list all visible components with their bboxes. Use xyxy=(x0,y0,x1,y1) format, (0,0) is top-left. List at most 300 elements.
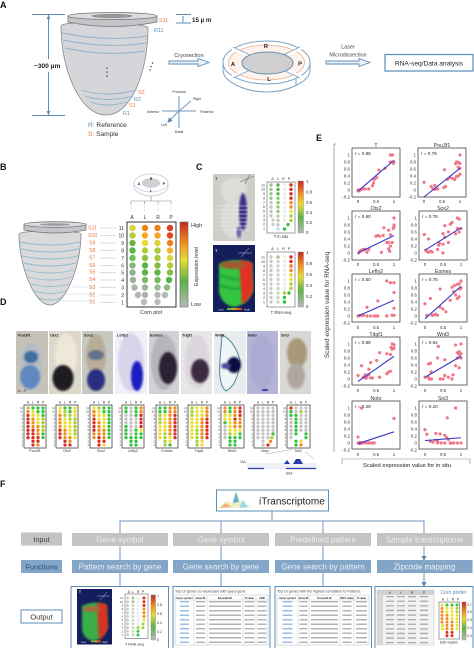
colorbar: RNA-seq: 0.6 xyxy=(306,272,313,277)
corn plot: T in situ: 10 xyxy=(261,188,265,192)
image: T RNA-seq 3D: High xyxy=(244,308,251,312)
scatter: Eomes: 0.4 xyxy=(411,300,418,304)
scatter: Otx2: -0.2 xyxy=(342,258,351,262)
ring section diagram xyxy=(223,41,310,92)
corn plot: Lefty2: 11 xyxy=(118,406,121,410)
arrows functions to output xyxy=(120,573,424,586)
gene names: Lefty2 xyxy=(128,449,138,453)
output 1: pattern search: 8 xyxy=(121,607,123,611)
scatter: Tdgf1: 0.6 xyxy=(344,356,351,360)
corn plot: Six3: 7 xyxy=(284,421,286,425)
compass: Anterior xyxy=(147,110,160,114)
scatter: Sox2: r = 0.76 xyxy=(422,214,438,219)
scatter: Lefty2: 0 xyxy=(357,325,360,330)
scatter: T: 0 xyxy=(357,199,360,204)
scatter: Eomes: -0.2 xyxy=(409,320,418,326)
input boxes xyxy=(72,533,472,546)
output 1: pattern search: 5 xyxy=(121,618,123,622)
section and row labels xyxy=(88,226,124,306)
scatter: Sox2: 0 xyxy=(415,250,418,256)
corn plot: Pou3f1: 6 xyxy=(21,424,23,428)
corn plot: Wnt3: 4 xyxy=(218,432,220,436)
corn plot: T in situ: 9 xyxy=(263,192,265,196)
section and row labels: S9 xyxy=(89,240,95,246)
scatter: T: 0 xyxy=(348,188,351,192)
section and row labels: 4 xyxy=(121,278,124,284)
corn plot: Corn plot xyxy=(140,310,162,316)
embryo cup diagram xyxy=(61,12,157,115)
scatter: Six3: r = 0.10 xyxy=(422,404,438,409)
corn plot: Wnt3: 11 xyxy=(217,406,220,410)
output 4: zipcode mapping: 0.4 xyxy=(467,626,472,630)
gene names: Eomes xyxy=(161,449,173,453)
logo box xyxy=(216,490,328,511)
image: Pou3f1: Pou3f1 xyxy=(18,334,31,338)
scatter: Noto: 1 xyxy=(348,406,351,410)
corn plot: Wnt3: 9 xyxy=(218,413,220,417)
corn plot: Lefty2: 10 xyxy=(118,410,121,414)
corn plot: T in situ: ALRP xyxy=(271,177,291,181)
label C: C xyxy=(196,162,203,172)
section and row labels: 3 xyxy=(121,286,124,292)
input boxes: Sample transcriptome xyxy=(386,536,464,544)
corn plot: T RNA-seq: 11 xyxy=(261,256,265,260)
corn plot: Wnt3: ALRP xyxy=(224,400,242,404)
scatter: Otx2: 0.4 xyxy=(344,236,351,242)
corn plot: Otx2: 4 xyxy=(53,432,55,436)
output 3: pattern table: P value xyxy=(357,596,367,600)
label E: E xyxy=(316,133,322,143)
scatter: T: 0.4 xyxy=(344,174,351,178)
ring section diagram: L xyxy=(267,77,271,83)
output 1: pattern search: 4 xyxy=(121,622,123,626)
arrow: laser microdissection xyxy=(326,44,370,66)
scatter: Eomes: 0.5 xyxy=(440,325,447,330)
scatter: Tdgf1 xyxy=(342,332,400,393)
corn plot: Wnt3: 5 xyxy=(218,428,220,432)
scatter: Wnt3: 0 xyxy=(415,376,418,382)
corn plot: Sox2: 7 xyxy=(87,421,89,425)
scatter: Six3: 0.2 xyxy=(411,434,418,438)
scatter: Pou3f1: 0 xyxy=(423,199,426,204)
label F: F xyxy=(0,479,6,489)
output 1: pattern search: 11 xyxy=(120,596,123,600)
connectors xyxy=(120,511,424,533)
corn plot: Six3: 2 xyxy=(284,439,286,443)
section and row labels: S10 xyxy=(88,233,97,239)
scatter: Pou3f1 xyxy=(408,143,466,204)
scatter: Eomes: 1 xyxy=(460,325,463,330)
corn plot: Sox2: 3 xyxy=(87,436,89,440)
scatter: Tdgf1: Tdgf1 xyxy=(369,332,383,338)
corn plot: Tdgf1: 11 xyxy=(184,406,187,410)
section labels xyxy=(123,18,168,117)
output 3: pattern table: Gene symbol xyxy=(279,596,296,600)
output 3: pattern table: Ensembl ID xyxy=(317,596,332,600)
corn plot: Otx2: 6 xyxy=(53,424,55,428)
corn plot: Otx2: 11 xyxy=(52,406,55,410)
corn plot: Eomes: 10 xyxy=(152,410,155,414)
scatter: Noto: 0 xyxy=(357,452,360,457)
corn plot: Noto: 9 xyxy=(251,413,253,417)
legend reference and sample: Sample xyxy=(96,131,118,138)
corn plot: Pou3f1 xyxy=(20,400,46,448)
section and row labels: 2 xyxy=(121,293,124,299)
panel D: whole mount in situ images and corn plots xyxy=(0,297,317,476)
scatter: Tdgf1: 0.2 xyxy=(344,370,351,374)
output 4: zipcode mapping: 0.3 xyxy=(467,634,472,638)
corn plot: Eomes: 8 xyxy=(153,417,155,421)
scatter: Pou3f1: 1 xyxy=(414,152,417,158)
scatter: Wnt3: 0.8 xyxy=(411,348,418,354)
output 1: pattern search: 0.8 xyxy=(157,603,162,607)
output 1: pattern search xyxy=(71,586,168,648)
output 4: zipcode mapping: E5D~EpiSC xyxy=(440,640,459,644)
colorbar: in situ xyxy=(298,179,313,235)
corn plot: Sox2: 11 xyxy=(86,406,89,410)
corn plot: Six3: 5 xyxy=(284,428,286,432)
corn plot: Sox2: 1 xyxy=(87,443,89,447)
scatter: Tdgf1: 0 xyxy=(348,376,351,382)
corn plot: Otx2: 5 xyxy=(53,428,55,432)
output 1: pattern search: 0 xyxy=(157,638,159,642)
output 1: pattern search: 2 xyxy=(121,629,123,633)
corn plot: Wnt3: 2 xyxy=(218,439,220,443)
scatter: T: T xyxy=(374,143,378,149)
ellipsis dots xyxy=(107,63,152,76)
corn plot: T in situ: 1 xyxy=(263,227,265,231)
panel E: scatter plots xyxy=(316,133,470,469)
output 2: co-expressed table: Gene ID xyxy=(196,596,206,600)
scatter: Otx2: 1 xyxy=(393,262,396,267)
scatter: T: 0.8 xyxy=(344,160,351,164)
output 3: pattern table: ROC value xyxy=(340,596,354,600)
image: Eomes: Eomes xyxy=(150,334,162,338)
scatter: Wnt3: -0.2 xyxy=(409,384,418,388)
output 4: zipcode mapping xyxy=(375,586,473,648)
output 2: co-expressed table xyxy=(173,586,270,648)
corn plot: Eomes: 5 xyxy=(153,428,155,432)
corn plot: T RNA-seq: 3 xyxy=(263,292,265,296)
corn plot: Eomes: 6 xyxy=(153,424,155,428)
corn plot: Six3: 6 xyxy=(284,424,286,428)
colorbar: in situ: 0.8 xyxy=(306,190,313,194)
scatter: Wnt3: Wnt3 xyxy=(437,332,449,338)
image: Lefty2 xyxy=(115,331,147,394)
gene names: Noto xyxy=(261,449,269,453)
compass: Proximal xyxy=(172,90,186,94)
corn plot: T in situ: 5 xyxy=(263,210,265,214)
section and row labels: S1 xyxy=(89,300,95,306)
scatter: Six3: 0.5 xyxy=(440,452,447,457)
output 2: co-expressed table: Ensembl ID xyxy=(218,596,232,600)
scatter: Otx2: 0.2 xyxy=(344,244,351,248)
scatter: Otx2: 0.8 xyxy=(344,222,351,228)
colorbar: RNA-seq: 0 xyxy=(306,304,309,309)
corn plot: Wnt3: 1 xyxy=(218,443,220,447)
scatter: Sox2: Sox2 xyxy=(437,206,449,212)
gene names: Tdgf1 xyxy=(194,449,204,453)
section and row labels: 6 xyxy=(121,264,124,270)
scatter: Noto: 0.4 xyxy=(344,426,351,432)
scatter: Eomes: 0.6 xyxy=(411,292,418,298)
corn plot: Noto: 8 xyxy=(251,417,253,421)
scatter: Sox2: 0.6 xyxy=(411,230,418,234)
colorbar: in situ: 1 xyxy=(306,179,309,184)
scatter: Noto: -0.2 xyxy=(342,448,351,452)
scatter: Noto: 1 xyxy=(393,452,396,457)
corn plot: Pou3f1: 3 xyxy=(21,436,23,440)
corn plot: Lefty2: 4 xyxy=(119,432,121,436)
output 3: pattern table: Gene ID xyxy=(299,596,309,600)
image: Otx2 xyxy=(49,331,81,394)
scatter: Eomes: 0.2 xyxy=(411,306,418,312)
corn plot: Six3 xyxy=(283,400,310,448)
section and row labels: 5 xyxy=(121,270,124,276)
row label: Input xyxy=(21,532,62,546)
corn plot: T RNA-seq: T RNA-seq xyxy=(271,310,292,315)
output 1: pattern search: T xyxy=(79,590,81,594)
section and row labels: 10 xyxy=(118,234,124,240)
scatter: Eomes: Eomes xyxy=(435,269,451,275)
section and row labels: S11 xyxy=(88,226,97,232)
corn plot: Otx2: 7 xyxy=(53,421,55,425)
scatter: Lefty2: 0.5 xyxy=(373,325,380,330)
compass: Posterior xyxy=(200,110,215,114)
colorbar: RNA-seq: 1 xyxy=(306,250,309,255)
output 4: zipcode mapping: ALRP xyxy=(442,598,460,602)
scatter: Otx2: 0 xyxy=(357,262,360,267)
corn plot: Wnt3: 3 xyxy=(218,436,220,440)
corn plot: Tdgf1: 4 xyxy=(185,432,187,436)
corn plot: Otx2: 3 xyxy=(53,436,55,440)
scatter: Pou3f1: r = 0.79 xyxy=(421,151,437,156)
scatter: Tdgf1: -0.2 xyxy=(342,384,351,388)
input boxes: Predefined pattern xyxy=(290,536,356,544)
gene names: Sox2 xyxy=(97,449,105,453)
corn plot: Sox2: ALRP xyxy=(93,400,111,404)
scatter: Noto: 0.6 xyxy=(344,420,351,424)
image: Eomes xyxy=(149,331,179,394)
height dimension: ~300 µm xyxy=(34,63,60,70)
corn plot: Six3: 4 xyxy=(284,432,286,436)
scatter: Pou3f1: -0.2 xyxy=(408,194,417,200)
output 2: co-expressed table: FDR xyxy=(259,596,265,600)
section labels: S1 xyxy=(129,103,136,109)
section and row labels: 11 xyxy=(119,226,124,232)
corn plot: Sox2: 5 xyxy=(87,428,89,432)
corn plot: T RNA-seq: 4 xyxy=(263,287,265,291)
scatter: Pou3f1: 0.4 xyxy=(410,174,417,178)
scatter: Wnt3: 0.2 xyxy=(411,370,418,374)
colorbar: in situ: 0.4 xyxy=(306,210,313,215)
scatter: Pou3f1: 0.8 xyxy=(410,160,417,164)
scatter: Otx2 xyxy=(342,206,400,267)
corn plot: Six3: 9 xyxy=(284,413,286,417)
image: T in situ: T xyxy=(215,176,218,181)
panel A: sampling workflow xyxy=(0,0,473,138)
corn plot: Eomes: 7 xyxy=(153,421,155,425)
scatter: Noto: 0 xyxy=(348,440,351,446)
scatter: Noto: 0.8 xyxy=(344,412,351,418)
corn plot: Pou3f1: 11 xyxy=(20,406,23,410)
compass: Distal xyxy=(175,130,183,134)
output 1: pattern search: 1 xyxy=(121,633,123,637)
scatter: Noto: Noto xyxy=(371,396,382,402)
image: Wnt3: Wnt3 xyxy=(215,334,224,338)
gene names: Pou3f1 xyxy=(29,449,41,453)
image: Six3: Six3 xyxy=(281,334,289,338)
corn plot: Pou3f1: 8 xyxy=(21,417,23,421)
corn plot: Lefty2: 3 xyxy=(119,436,121,440)
scatter: Lefty2: Lefty2 xyxy=(369,269,383,275)
corn plot: Pou3f1: 2 xyxy=(21,439,23,443)
scatter: Six3: 0.8 xyxy=(411,412,418,418)
image: Sox2: Sox2 xyxy=(84,334,93,338)
scatter: Six3: 1 xyxy=(415,406,418,410)
legend reference and sample: R: Reference xyxy=(88,122,127,129)
section and row labels: S3 xyxy=(89,285,95,291)
scatter: Six3 xyxy=(409,396,467,457)
scatter: T xyxy=(342,143,400,204)
scatter: Wnt3 xyxy=(409,332,467,393)
scatter: Six3: 0 xyxy=(415,440,418,446)
corn plot: Noto: 7 xyxy=(251,421,253,425)
row label: Output xyxy=(21,610,62,623)
output 1: pattern search: ALRP xyxy=(128,590,145,594)
scatter: Noto xyxy=(342,396,400,457)
scatter: T: -0.2 xyxy=(342,194,351,200)
panel C: T expression xyxy=(196,162,313,315)
input boxes: Gene symbol xyxy=(197,536,245,544)
image: Pou3f1 xyxy=(16,331,48,394)
genome track: Six3 xyxy=(286,472,292,476)
corn plot: Tdgf1: ALRP xyxy=(191,400,209,404)
output 2: co-expressed table: Top 10 genes co-expressed with query gene xyxy=(175,590,246,594)
scatter: Pou3f1: 1 xyxy=(459,199,462,204)
scatter: Lefty2: 1 xyxy=(348,278,351,284)
image: Noto xyxy=(247,331,278,394)
corn plot: Eomes: 11 xyxy=(152,406,155,410)
RNA-seq box xyxy=(385,54,473,71)
output 4: zipcode mapping: 0.7 xyxy=(467,603,472,607)
x axis bracket xyxy=(342,459,470,469)
corn plot: Pou3f1: 7 xyxy=(21,421,23,425)
output 1: pattern search: 1 xyxy=(157,594,159,598)
scatter: Wnt3: 0.4 xyxy=(411,362,418,368)
scatter: Six3: 1 xyxy=(460,452,463,457)
section and row labels: 9 xyxy=(121,241,124,247)
corn plot: T in situ: 3 xyxy=(263,218,265,222)
scatter: Tdgf1: 0 xyxy=(357,388,360,393)
scatter: Wnt3: 0 xyxy=(424,388,427,393)
small ring and tree: P xyxy=(163,182,166,186)
corn plot: Six3: 3 xyxy=(284,436,286,440)
corn plot: Tdgf1: 9 xyxy=(185,413,187,417)
scatter: Eomes: 0 xyxy=(415,314,418,318)
scatter: T: 1 xyxy=(393,199,396,204)
corn plot: T in situ: 8 xyxy=(263,196,265,200)
corn plot: T RNA-seq: 2 xyxy=(263,296,265,300)
section thickness: 15 µ m xyxy=(192,17,212,24)
scatter: Sox2: 0.4 xyxy=(411,236,418,242)
function boxes xyxy=(72,560,472,573)
corn plot: Noto xyxy=(250,400,277,448)
function boxes: Pattern search by gene xyxy=(79,562,162,572)
corn plot: Noto: 4 xyxy=(251,432,253,436)
corn plot: Eomes: 3 xyxy=(153,436,155,440)
ring section diagram: A xyxy=(231,62,236,68)
image: T RNA-seq 3D: Low xyxy=(218,308,224,312)
section and row labels: S6 xyxy=(89,263,95,269)
corn plot: T in situ xyxy=(261,177,295,239)
corn plot: Pou3f1: 4 xyxy=(21,432,23,436)
section thickness xyxy=(176,14,212,24)
logo box: iTranscriptome xyxy=(259,496,325,508)
scatter: Pou3f1: Pou3f1 xyxy=(434,143,450,149)
arrow: laser microdissection: Microdissection xyxy=(329,52,367,58)
ring section diagram: P xyxy=(298,62,302,68)
corn plot: Lefty2: 1 xyxy=(119,443,121,447)
corn plot: Sox2: 6 xyxy=(87,424,89,428)
scatter: Tdgf1: r = 0.68 xyxy=(355,340,371,345)
scatter: Six3: 0 xyxy=(424,452,427,457)
corn plot: Tdgf1: 8 xyxy=(185,417,187,421)
scatter: T: 1 xyxy=(348,152,351,158)
scatter: Tdgf1: 0.4 xyxy=(344,362,351,368)
compass: Left xyxy=(161,123,167,127)
small ring and tree xyxy=(130,174,173,221)
corn plot: Lefty2: 7 xyxy=(119,421,121,425)
scatter: Wnt3: r = 0.64 xyxy=(422,340,438,345)
scatter: Lefty2: 1 xyxy=(393,325,396,330)
scatter: Lefty2: r = 0.60 xyxy=(355,277,371,282)
scatter: Lefty2: 0.2 xyxy=(344,306,351,312)
scatter: Lefty2: 0.4 xyxy=(344,300,351,304)
section labels: R2 xyxy=(134,97,141,103)
output 4: zipcode mapping: ALRP xyxy=(389,590,425,594)
scatter: Noto: r = 0.29 xyxy=(355,404,371,409)
corn plot: T RNA-seq: 5 xyxy=(263,282,265,286)
scatter: Otx2: 0 xyxy=(348,250,351,256)
colorbar: in situ: 0 xyxy=(306,230,309,235)
row label: Functions xyxy=(21,560,62,573)
output 1: pattern search: T RNA-seq xyxy=(125,642,144,646)
scatter: Eomes: 1 xyxy=(415,278,418,284)
cup with sections xyxy=(19,222,95,305)
colorbar: RNA-seq: 0.2 xyxy=(306,294,313,299)
row label: Output: Output xyxy=(30,612,53,622)
scatter: Sox2: 1 xyxy=(460,262,463,267)
corn plot: T RNA-seq: 8 xyxy=(263,269,265,273)
section and row labels: S8 xyxy=(89,248,95,254)
scatter: Tdgf1: 1 xyxy=(348,342,351,346)
scatter: Sox2 xyxy=(409,206,467,267)
image: T in situ xyxy=(213,174,255,241)
corn plot: T RNA-seq: 7 xyxy=(263,274,265,278)
scatter: Wnt3: 1 xyxy=(460,388,463,393)
arrow: laser microdissection: Laser xyxy=(341,44,355,50)
output 2: co-expressed table: Gene symbol xyxy=(176,596,193,600)
scatter: Tdgf1: 0.8 xyxy=(344,348,351,354)
corn plot: T in situ: 4 xyxy=(263,214,265,218)
scatter: Lefty2: -0.2 xyxy=(342,320,351,326)
expression colorbar: Low xyxy=(191,302,201,308)
scatter: Otx2: 0.5 xyxy=(373,262,380,267)
output 1: pattern search: 10 xyxy=(120,600,123,604)
corn plot: T RNA-seq xyxy=(261,247,295,315)
corn plot: Wnt3 xyxy=(217,400,244,448)
